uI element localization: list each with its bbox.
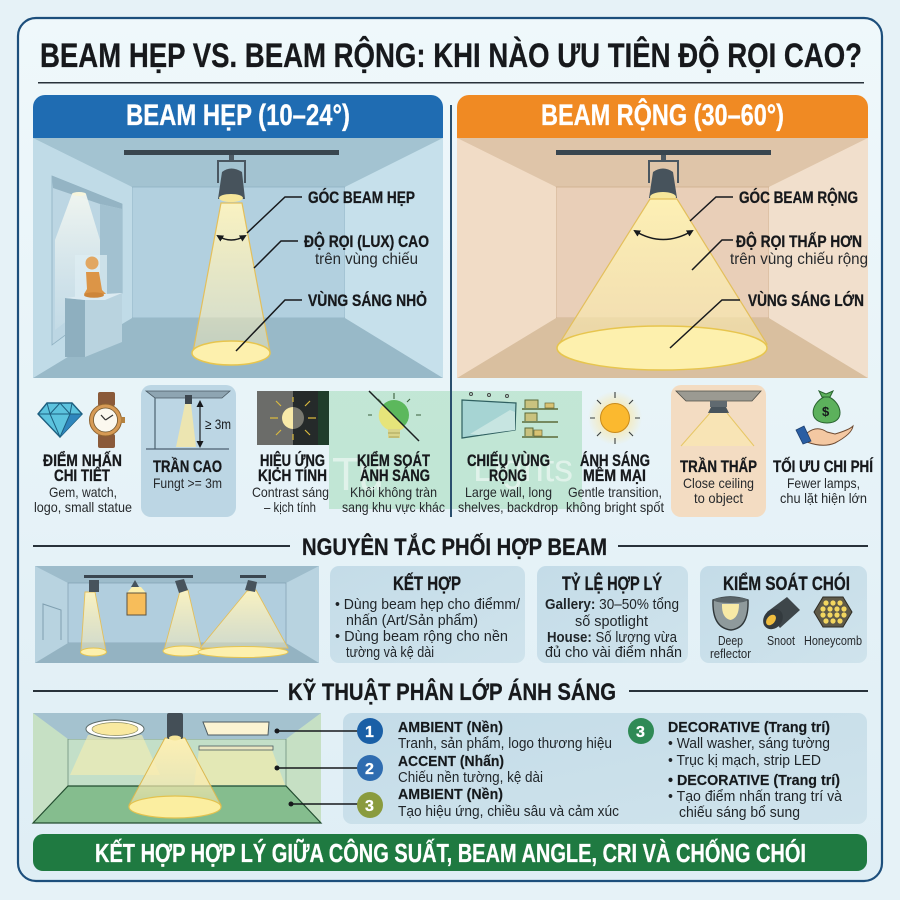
illustration: layered lighting room — [33, 713, 358, 823]
badge 2: 2 — [365, 761, 374, 778]
feature: ánh sáng mềm mại: không bright spốt — [566, 499, 664, 515]
watermark band: Tu — [332, 448, 384, 500]
beam cone: wide — [557, 199, 767, 370]
spotlight: wide — [556, 150, 771, 202]
feature card: trần thấp: to object — [694, 490, 743, 506]
badge 3 decorative: 3 — [636, 724, 645, 741]
watermark band: Lights — [473, 448, 573, 490]
card: layer descriptions: ACCENT (Nhấn) — [398, 753, 504, 770]
panel: beam rộng — [457, 95, 868, 378]
feature: điểm nhấn chi tiết — [34, 392, 132, 515]
lamp and narrow beam — [80, 580, 106, 656]
accent spotlight beam — [129, 713, 221, 818]
icon: deep reflector: reflector — [710, 646, 752, 661]
feature card: trần thấp — [671, 385, 766, 517]
badge 3 — [357, 792, 383, 818]
icon: snoot: Snoot — [767, 633, 795, 648]
beam cone: narrow — [192, 203, 270, 365]
badge 1 — [357, 718, 383, 744]
feature: ánh sáng mềm mại: Gentle transition, — [568, 484, 662, 500]
feature: chiếu vùng rộng — [458, 392, 558, 515]
feature: hiệu ứng kịch tính: Contrast sáng — [252, 484, 329, 500]
badge 1: 1 — [365, 724, 374, 741]
badge 3: 3 — [365, 798, 374, 815]
feature: điểm nhấn chi tiết: ĐIỂM NHẤN — [43, 451, 122, 470]
card: kết hợp: • Dùng beam rộng cho nền — [335, 628, 508, 645]
badge 2 — [357, 755, 383, 781]
feature: ánh sáng mềm mại — [566, 391, 664, 515]
heading: kỹ thuật phân lớp ánh sáng: KỸ THUẬT PHÂN LỚP ÁNH SÁNG — [288, 678, 616, 706]
room: beam rộng — [457, 138, 868, 378]
display alcove with statue — [52, 176, 122, 357]
heading: nguyên tắc phối hợp beam: NGUYÊN TẮC PHỐI HỢP BEAM — [302, 533, 607, 561]
spotlight: narrow — [124, 150, 339, 202]
feature: tối ưu chi phí: TỐI ƯU CHI PHÍ — [773, 456, 874, 476]
layer leader lines — [274, 728, 358, 806]
lamp and medium beam — [163, 579, 203, 656]
card: kiểm soát chói: KIỂM SOÁT CHÓI — [723, 573, 850, 595]
card: layer descriptions: DECORATIVE (Trang trí) — [668, 719, 830, 736]
card: kết hợp: tường và kệ dài — [346, 644, 434, 661]
watermark band — [329, 391, 582, 509]
card: layer descriptions: • Wall washer, sáng tường — [668, 735, 830, 752]
callouts: beam rộng: VÙNG SÁNG LỚN — [748, 291, 864, 310]
feature: kiểm soát ánh sáng: KIỂM SOÁT — [357, 451, 430, 470]
feature: kiểm soát ánh sáng: ÁNH SÁNG — [360, 466, 430, 485]
icon: honeycomb — [804, 597, 862, 648]
icon: bulb with slash — [368, 391, 421, 441]
feature: chiếu vùng rộng: Large wall, long — [465, 484, 552, 500]
lamp and artwork — [127, 580, 146, 615]
callouts: beam rộng: GÓC BEAM RỘNG — [739, 188, 858, 207]
card: layer descriptions: Tạo hiệu ứng, chiều sâu và cảm xúc — [398, 803, 619, 820]
icon: deep reflector: Deep — [718, 633, 743, 648]
card: tỷ lệ hợp lý: TỶ LỆ HỢP LÝ — [562, 573, 662, 595]
icon: contrast sun — [257, 391, 329, 445]
callouts: beam hẹp: ĐỘ RỌI (LUX) CAO — [304, 232, 429, 251]
feature: chiếu vùng rộng: shelves, backdrop — [458, 499, 558, 515]
icon: low ceiling — [676, 391, 761, 446]
card: kết hợp: KẾT HỢP — [393, 573, 461, 595]
card: layer descriptions: AMBIENT (Nền) — [398, 719, 503, 736]
feature card: trần cao — [141, 385, 236, 517]
card: layer descriptions: AMBIENT (Nền) — [398, 786, 503, 803]
card: kết hợp: nhấn (Art/Sản phẩm) — [346, 612, 478, 629]
header: beam rộng: BEAM RỘNG (30–60°) — [541, 98, 784, 132]
card: layer descriptions: • DECORATIVE (Trang trí) — [668, 772, 840, 789]
callouts: beam hẹp — [236, 188, 429, 351]
card: kết hợp — [330, 566, 525, 663]
card: layer descriptions: • Tạo điểm nhấn trang trí và — [668, 788, 843, 805]
feature card: trần thấp: TRẦN THẤP — [680, 457, 757, 476]
card: tỷ lệ hợp lý: đủ cho vài điểm nhấn — [545, 644, 682, 661]
icon: wall and shelves — [462, 392, 558, 438]
header: beam hẹp — [33, 95, 443, 138]
card: tỷ lệ hợp lý: Gallery: 30–50% tổng — [545, 596, 679, 613]
feature card: trần cao: Fungt >= 3m — [153, 475, 222, 491]
feature: kiểm soát ánh sáng: sang khu vực khác — [342, 499, 445, 515]
icon: snoot — [759, 597, 800, 648]
feature card: trần thấp: Close ceiling — [683, 475, 754, 491]
feature: tối ưu chi phí: Fewer lamps, — [787, 475, 860, 491]
card: tỷ lệ hợp lý — [537, 566, 688, 663]
icon: money bag on hand: $ — [822, 404, 830, 419]
panel: beam hẹp — [33, 95, 443, 378]
card: layer descriptions: Tranh, sản phẩm, logo thương hiệu — [398, 735, 612, 752]
icon: honeycomb: Honeycomb — [804, 633, 862, 648]
card: kết hợp: • Dùng beam hẹp cho điểmm/ — [335, 596, 521, 613]
callouts: beam hẹp: GÓC BEAM HẸP — [308, 188, 415, 207]
strip light — [194, 746, 285, 785]
panel light — [203, 722, 269, 735]
card: layer descriptions: Chiếu nền tường, kệ dài — [398, 769, 543, 786]
feature: ánh sáng mềm mại: ÁNH SÁNG — [580, 451, 650, 470]
room: beam hẹp — [33, 138, 443, 378]
ambient round light — [70, 720, 160, 775]
callouts: beam rộng — [670, 188, 868, 348]
feature: ánh sáng mềm mại: MỀM MẠI — [583, 466, 646, 485]
header: beam hẹp: BEAM HẸP (10–24°) — [126, 99, 350, 132]
feature: hiệu ứng kịch tính — [252, 391, 329, 515]
feature card: trần cao: TRẦN CAO — [153, 457, 222, 476]
card: tỷ lệ hợp lý: House: Số lượng vừa — [547, 629, 678, 646]
lamp and wide beam — [198, 580, 288, 658]
icon: sun — [588, 391, 642, 445]
feature: chiếu vùng rộng: RỘNG — [489, 466, 527, 485]
divider between panels — [450, 105, 452, 517]
illustration: mixed beams room — [35, 566, 319, 663]
feature: điểm nhấn chi tiết: logo, small statue — [34, 499, 132, 515]
card: layer descriptions: • Trục kị mạch, strip LED — [668, 752, 821, 769]
icon: high ceiling: ≥ 3m — [205, 416, 231, 432]
callouts: beam rộng: trên vùng chiếu rộng — [730, 251, 868, 268]
callouts: beam hẹp: trên vùng chiếu — [315, 251, 418, 268]
callouts: beam rộng: ĐỘ RỌI THẤP HƠN — [736, 232, 862, 251]
icon: gem — [38, 403, 82, 437]
card: layer descriptions — [343, 713, 867, 824]
header: beam rộng — [457, 95, 868, 138]
card: layer descriptions: chiếu sáng bổ sung — [679, 804, 800, 821]
card: tỷ lệ hợp lý: số spotlight — [575, 613, 649, 630]
feature: điểm nhấn chi tiết: Gem, watch, — [49, 484, 117, 500]
card: kiểm soát chói — [700, 566, 867, 663]
callouts: beam hẹp: VÙNG SÁNG NHỎ — [308, 291, 427, 310]
feature: tối ưu chi phí: chu lặt hiện lớn — [780, 490, 867, 506]
feature: hiệu ứng kịch tính: HIỆU ỨNG — [260, 451, 325, 470]
feature: hiệu ứng kịch tính: KỊCH TÍNH — [258, 466, 327, 485]
feature: tối ưu chi phí — [773, 391, 874, 506]
feature: điểm nhấn chi tiết: CHI TIẾT — [54, 466, 110, 485]
feature: hiệu ứng kịch tính: – kịch tính — [264, 499, 316, 515]
badge 3 decorative — [628, 718, 654, 744]
feature: kiểm soát ánh sáng: Khôi không tràn — [350, 484, 437, 500]
icon: deep reflector — [710, 597, 752, 661]
feature: kiểm soát ánh sáng — [342, 391, 445, 515]
icon: watch — [90, 392, 125, 448]
feature: chiếu vùng rộng: CHIẾU VÙNG — [467, 451, 550, 470]
